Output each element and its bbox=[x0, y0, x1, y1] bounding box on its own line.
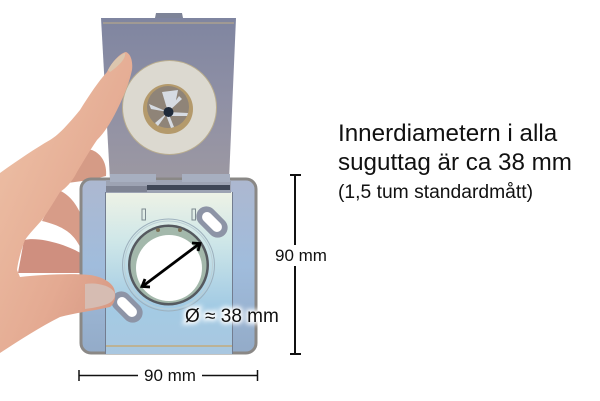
fingernail bbox=[108, 53, 125, 72]
subheading: (1,5 tum standardmått) bbox=[338, 181, 533, 203]
outlet ring bbox=[122, 219, 214, 311]
height dimension line bbox=[290, 175, 301, 354]
diameter label: Ø ≈ 38 mm bbox=[185, 306, 279, 327]
height label: 90 mm bbox=[275, 246, 327, 265]
back fingers bbox=[18, 150, 106, 273]
hinge bbox=[106, 174, 231, 193]
width label: 90 mm bbox=[144, 366, 196, 385]
diameter label: Ø ≈ 38 mm bbox=[185, 306, 279, 327]
width dimension line bbox=[79, 370, 258, 381]
index marks bbox=[142, 209, 196, 220]
hand bbox=[0, 52, 132, 353]
thumbnail bbox=[85, 283, 115, 309]
valve opening bbox=[143, 84, 193, 134]
heading bbox=[338, 120, 572, 176]
heading: Innerdiametern i alla bbox=[338, 120, 558, 147]
mounting slot upper bbox=[192, 202, 232, 242]
heading: suguttag är ca 38 mm bbox=[338, 149, 572, 176]
socket plate bbox=[81, 174, 256, 354]
mounting slot lower bbox=[107, 287, 147, 327]
lid bbox=[101, 13, 236, 180]
diameter arrow bbox=[142, 243, 200, 287]
lid seal disc bbox=[122, 60, 216, 154]
